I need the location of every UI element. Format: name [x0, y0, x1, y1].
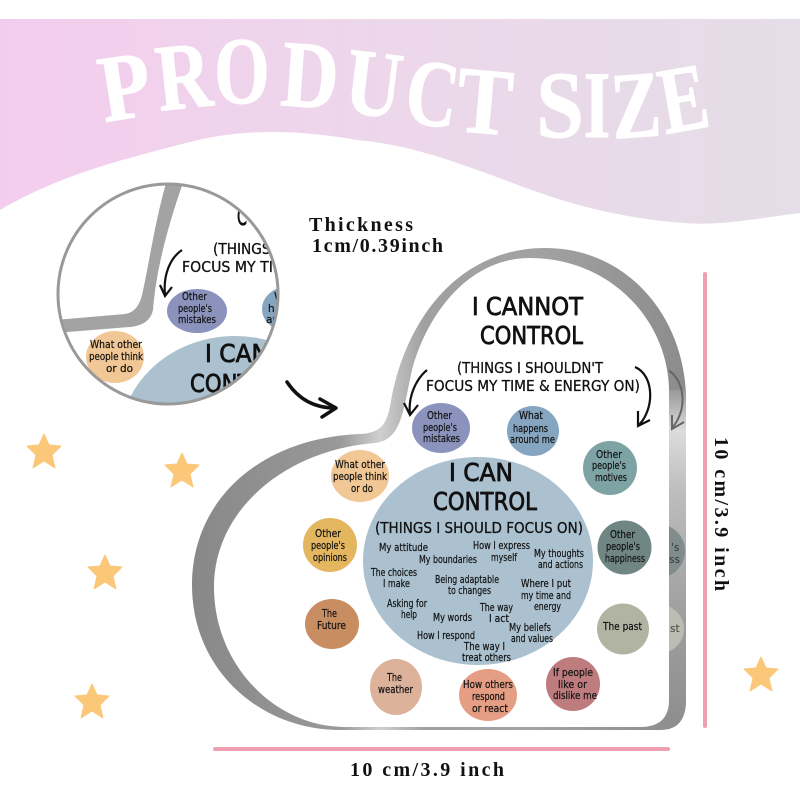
heading: I cannot control: FOCUS MY TIME & ENERGY ON): [426, 377, 640, 395]
panel: I can control circle: I act: [489, 613, 509, 625]
heart rim: [192, 248, 686, 730]
magnifier lens: I CAN: [205, 339, 269, 368]
bubble: what happens around me: [507, 406, 559, 456]
panel: I can control circle: (THINGS I SHOULD FOCUS ON): [375, 519, 583, 537]
panel: I can control circle: Asking for: [387, 598, 428, 610]
stars: [27, 434, 778, 718]
bubble: if people like or dislike me: [546, 657, 600, 711]
magnifier lens: Other: [182, 291, 208, 303]
thickness label: Thickness: [309, 214, 413, 236]
panel: I can control circle: my time and: [521, 590, 571, 602]
height dimension bar: [703, 272, 707, 728]
bubble: other people's motives: [583, 441, 637, 495]
panel: I can control circle: My beliefs: [509, 622, 551, 634]
title: PRODUCT SIZE: T: [452, 47, 517, 157]
bubble: what happens around me: around me: [510, 434, 555, 446]
rim right strip with reflections: st: [670, 623, 680, 635]
heading: I cannot control: I CANNOT: [472, 292, 584, 321]
bubble: how others respond or react: respond: [472, 691, 505, 703]
panel: I can control circle: The way I: [463, 641, 505, 653]
bubble: other people's opinions: people's: [311, 540, 345, 552]
pink header band: [0, 19, 800, 224]
magnifier lens: h: [268, 303, 275, 315]
bubble: other people's opinions: Other: [315, 528, 342, 540]
panel: I can control circle: My attitude: [379, 542, 428, 554]
panel: I can control circle: How I respond: [417, 630, 475, 642]
panel: I can control circle: Where I put: [521, 578, 571, 590]
bubble: other people's happiness: [598, 520, 652, 574]
bubble: the future: Future: [317, 620, 346, 632]
bubble: what other people think or do: or do: [351, 483, 373, 495]
bubble: if people like or dislike me: If people: [553, 667, 593, 679]
bubble: the weather: [370, 659, 422, 715]
magnifier lens: (THINGS I: [213, 240, 279, 258]
bubble: other people's mistakes: mistakes: [423, 433, 460, 445]
magnifier lens: ar: [266, 314, 277, 326]
bubble: what other people think or do: people think: [333, 471, 388, 483]
heading: I cannot control: CONTROL: [480, 321, 583, 350]
bubble: other people's happiness: Other: [610, 529, 636, 541]
title: PRODUCT SIZE: I: [584, 52, 610, 158]
panel: I can control circle: [363, 457, 593, 665]
panel: I can control circle: help: [401, 609, 417, 621]
heart face: [214, 258, 669, 727]
magnifier lens: mistakes: [178, 314, 216, 326]
panel: I can control circle: I CAN: [449, 458, 513, 487]
magnifier lens: FOCUS MY TIME: [182, 258, 294, 276]
bubble: other people's mistakes: people's: [423, 422, 457, 434]
magnifier lens: or do: [106, 363, 133, 375]
panel: I can control circle: myself: [491, 552, 517, 564]
panel: I can control circle: My thoughts: [534, 548, 584, 560]
bubble: other people's mistakes: Other: [427, 410, 453, 422]
bubble: other people's motives: motives: [595, 472, 627, 484]
bubble: how others respond or react: [459, 669, 517, 721]
magnifier lens: C: [237, 202, 247, 231]
arrow right: [635, 367, 650, 426]
title: PRODUCT SIZE: S: [536, 52, 584, 158]
panel: I can control circle: and actions: [538, 559, 583, 571]
bubble: other people's mistakes: [412, 403, 470, 453]
arrow left: [404, 370, 427, 415]
panel: I can control circle: I make: [383, 578, 410, 590]
panel: I can control circle: and values: [511, 633, 553, 645]
title: PRODUCT SIZE: O: [214, 19, 270, 124]
title: PRODUCT SIZE: R: [151, 20, 217, 132]
bubble: other people's motives: people's: [592, 460, 626, 472]
bubble: the past: [597, 604, 649, 654]
bubble: how others respond or react: How others: [463, 679, 513, 691]
heart plaque: [192, 248, 686, 730]
magnifier lens: people's: [178, 303, 212, 315]
panel: I can control circle: Being adaptable: [435, 574, 499, 586]
bubble: other people's opinions: [303, 518, 357, 572]
panel: I can control circle: My words: [433, 612, 472, 624]
title: PRODUCT SIZE: Z: [608, 52, 664, 160]
bubble: the past: The past: [602, 621, 642, 633]
panel: I can control circle: energy: [534, 601, 561, 613]
title: PRODUCT SIZE: U: [340, 28, 408, 139]
bubble: other people's opinions: opinions: [313, 552, 347, 564]
heading: I cannot control: (THINGS I SHOULDN'T: [457, 359, 604, 377]
bubble: the weather: weather: [378, 684, 414, 696]
magnifier lens: CONTROL: [190, 369, 294, 398]
bubble: if people like or dislike me: like or: [558, 679, 588, 691]
panel: I can control circle: The choices: [370, 567, 417, 579]
lens: big blue circle: [131, 336, 266, 402]
arrow: lens to heart: [287, 382, 336, 417]
magnifier lens: What other: [90, 339, 143, 351]
width dimension bar: [213, 747, 670, 751]
bubble: the future: The: [321, 608, 337, 620]
heading: I cannot control: [426, 292, 640, 395]
bubble: what other people think or do: [331, 450, 389, 502]
panel: I can control circle: CONTROL: [433, 487, 537, 516]
title: PRODUCT SIZE: E: [651, 43, 716, 155]
rim right strip with reflections: 's: [671, 542, 679, 554]
width label: 10 cm/3.9 inch: [350, 759, 504, 781]
height label: 10 cm/3.9 inch: [710, 437, 732, 591]
magnifier lens: W: [274, 291, 285, 303]
thickness label: [309, 214, 443, 257]
panel: I can control circle: treat others: [462, 652, 511, 664]
bubble: what other people think or do: What other: [335, 459, 386, 471]
magnifier lens: [56, 182, 280, 406]
bubble: other people's happiness: happiness: [605, 553, 645, 565]
panel: I can control circle: The way: [479, 602, 513, 614]
bubble: the future: [305, 599, 359, 649]
bubble: how others respond or react: or react: [472, 703, 508, 715]
title: PRODUCT SIZE: C: [399, 39, 465, 150]
magnifier lens: people think: [89, 351, 144, 363]
panel: I can control circle: My boundaries: [419, 554, 477, 566]
title: PRODUCT SIZE: D: [278, 20, 342, 130]
panel: I can control circle: How I express: [473, 540, 530, 552]
bubble: if people like or dislike me: dislike me: [553, 690, 597, 702]
title: PRODUCT SIZE: [92, 19, 716, 160]
title: PRODUCT SIZE: P: [92, 31, 159, 143]
bubble: the weather: The: [386, 672, 402, 684]
bubble: other people's motives: Other: [596, 449, 623, 461]
bubble: what happens around me: What: [519, 410, 543, 422]
panel: I can control circle: to changes: [448, 585, 491, 597]
rim right strip with reflections: [669, 370, 686, 729]
thickness label: 1cm/0.39inch: [312, 235, 443, 257]
bubble: what happens around me: happens: [513, 423, 548, 435]
bubble: other people's happiness: people's: [606, 541, 640, 553]
rim right strip with reflections: ss: [669, 554, 680, 566]
